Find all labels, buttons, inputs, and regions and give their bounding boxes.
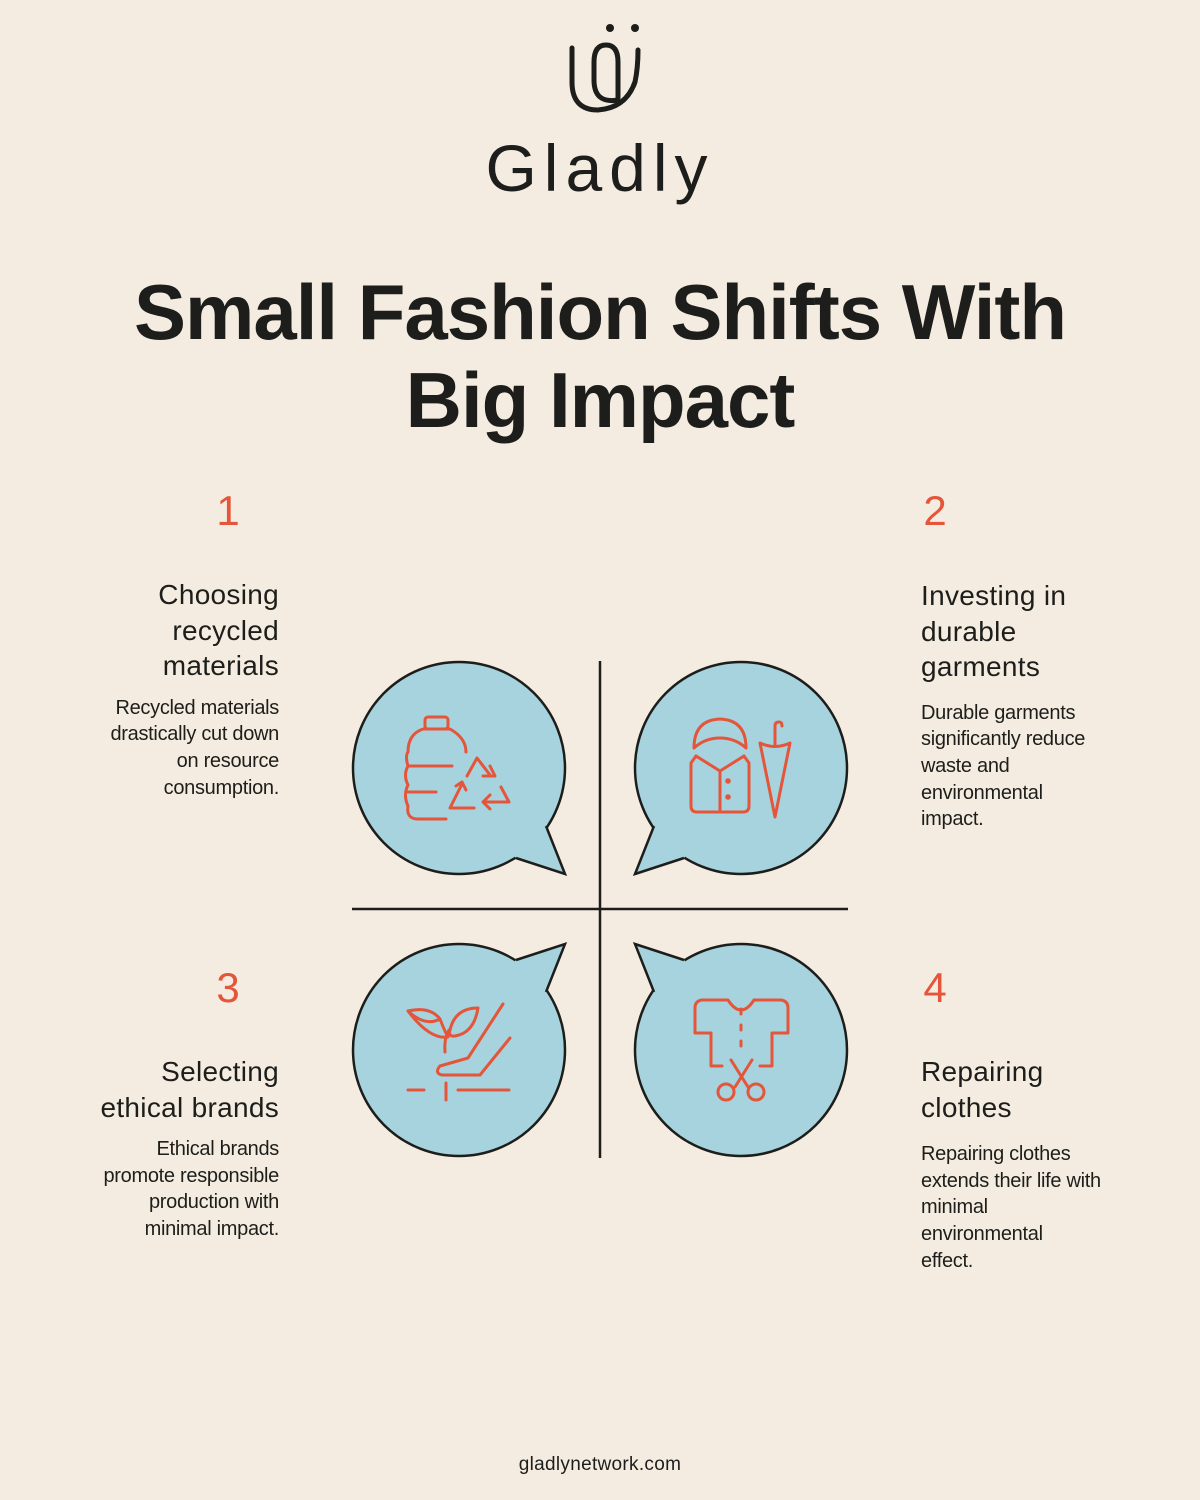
block 2: Investing in [921, 580, 1066, 611]
block 1: Choosing [158, 579, 279, 610]
block 3: ethical brands [100, 1092, 279, 1122]
block 2: Durable garments [921, 702, 1075, 724]
number 1: 1 [216, 487, 240, 534]
block 2: garments [921, 651, 1040, 682]
block 3 [100, 1056, 279, 1240]
brand name: Gladly [485, 131, 715, 205]
bubble 2 [635, 662, 847, 874]
block 4 [921, 1056, 1101, 1272]
block 1: on resource [177, 750, 279, 772]
block 4: effect. [921, 1250, 973, 1272]
block 3: promote responsible [103, 1165, 279, 1187]
block 2: significantly reduce [921, 728, 1085, 750]
number 2: 2 [923, 487, 947, 534]
logo mark [570, 24, 640, 112]
block 1: recycled [172, 614, 279, 646]
block 1: materials [163, 650, 279, 681]
block 2 [921, 580, 1085, 830]
title: Small Fashion Shifts With [134, 268, 1066, 356]
block 2: environmental [921, 782, 1043, 804]
icon: plant in hand [408, 1004, 510, 1100]
block 3: production with [149, 1191, 279, 1213]
block 3: minimal impact. [145, 1218, 279, 1240]
bubble 3 [353, 944, 565, 1156]
block 1: Recycled materials [115, 696, 279, 718]
block 4: Repairing [921, 1056, 1044, 1087]
title: Big Impact [406, 356, 794, 444]
block 1: consumption. [164, 777, 279, 799]
icon: raincoat umbrella [691, 719, 790, 817]
block 4: environmental [921, 1223, 1043, 1245]
number 4: 4 [923, 964, 947, 1011]
block 2: waste and [921, 755, 1009, 777]
bubble 4 [635, 944, 847, 1156]
block 4: Repairing clothes [921, 1143, 1070, 1165]
icon: shirt scissors [695, 1000, 788, 1100]
number 3: 3 [216, 964, 240, 1011]
block 2: impact. [921, 808, 983, 830]
block 1 [110, 579, 279, 799]
title [134, 268, 1066, 444]
block 1: drastically cut down [110, 723, 279, 745]
bubble 1 [353, 662, 565, 874]
block 4: clothes [921, 1092, 1012, 1122]
block 4: minimal [921, 1196, 988, 1218]
icon: bottle recycle [406, 717, 509, 819]
footer url: gladlynetwork.com [519, 1454, 681, 1475]
block 3: Selecting [161, 1056, 279, 1087]
block 2: durable [921, 616, 1017, 646]
block 4: extends their life with [921, 1170, 1101, 1192]
block 3: Ethical brands [156, 1138, 279, 1160]
